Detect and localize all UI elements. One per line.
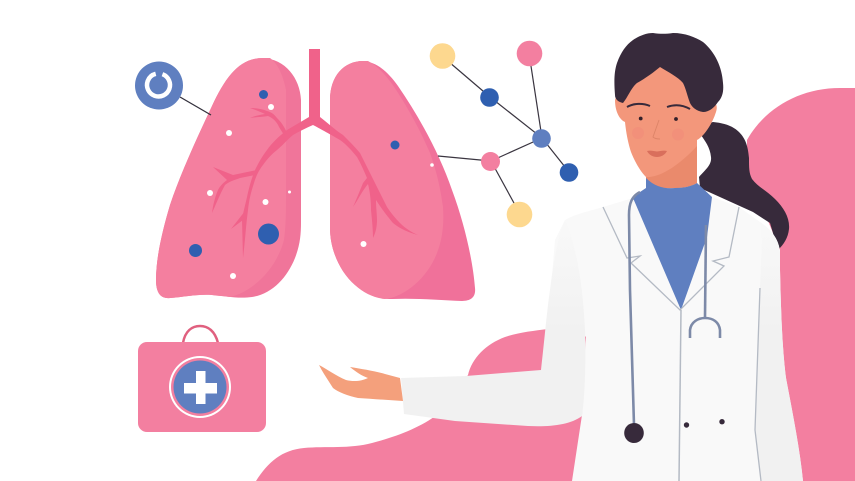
right lung xyxy=(330,61,475,301)
dots on lungs xyxy=(189,90,434,279)
neck and face xyxy=(615,50,717,188)
hair xyxy=(614,33,723,112)
hand xyxy=(319,365,403,401)
neck shadow xyxy=(646,146,697,188)
left lung xyxy=(156,58,301,298)
face features xyxy=(627,104,690,157)
icon: medical bag xyxy=(138,326,266,432)
background blob: bottom xyxy=(256,329,590,481)
molecule network xyxy=(430,41,578,227)
ponytail xyxy=(699,122,789,250)
coat xyxy=(550,197,803,481)
stethoscope xyxy=(624,192,720,443)
trachea and bronchi xyxy=(212,49,418,258)
background blob: right xyxy=(747,88,855,481)
icon: ring callout xyxy=(135,62,211,115)
sleeve right xyxy=(755,222,803,481)
doctor xyxy=(319,33,803,481)
coat lapels xyxy=(603,207,761,481)
lungs xyxy=(156,49,475,301)
turtleneck xyxy=(633,178,712,310)
sleeve left arm xyxy=(401,220,585,426)
coat buttons xyxy=(684,419,725,428)
